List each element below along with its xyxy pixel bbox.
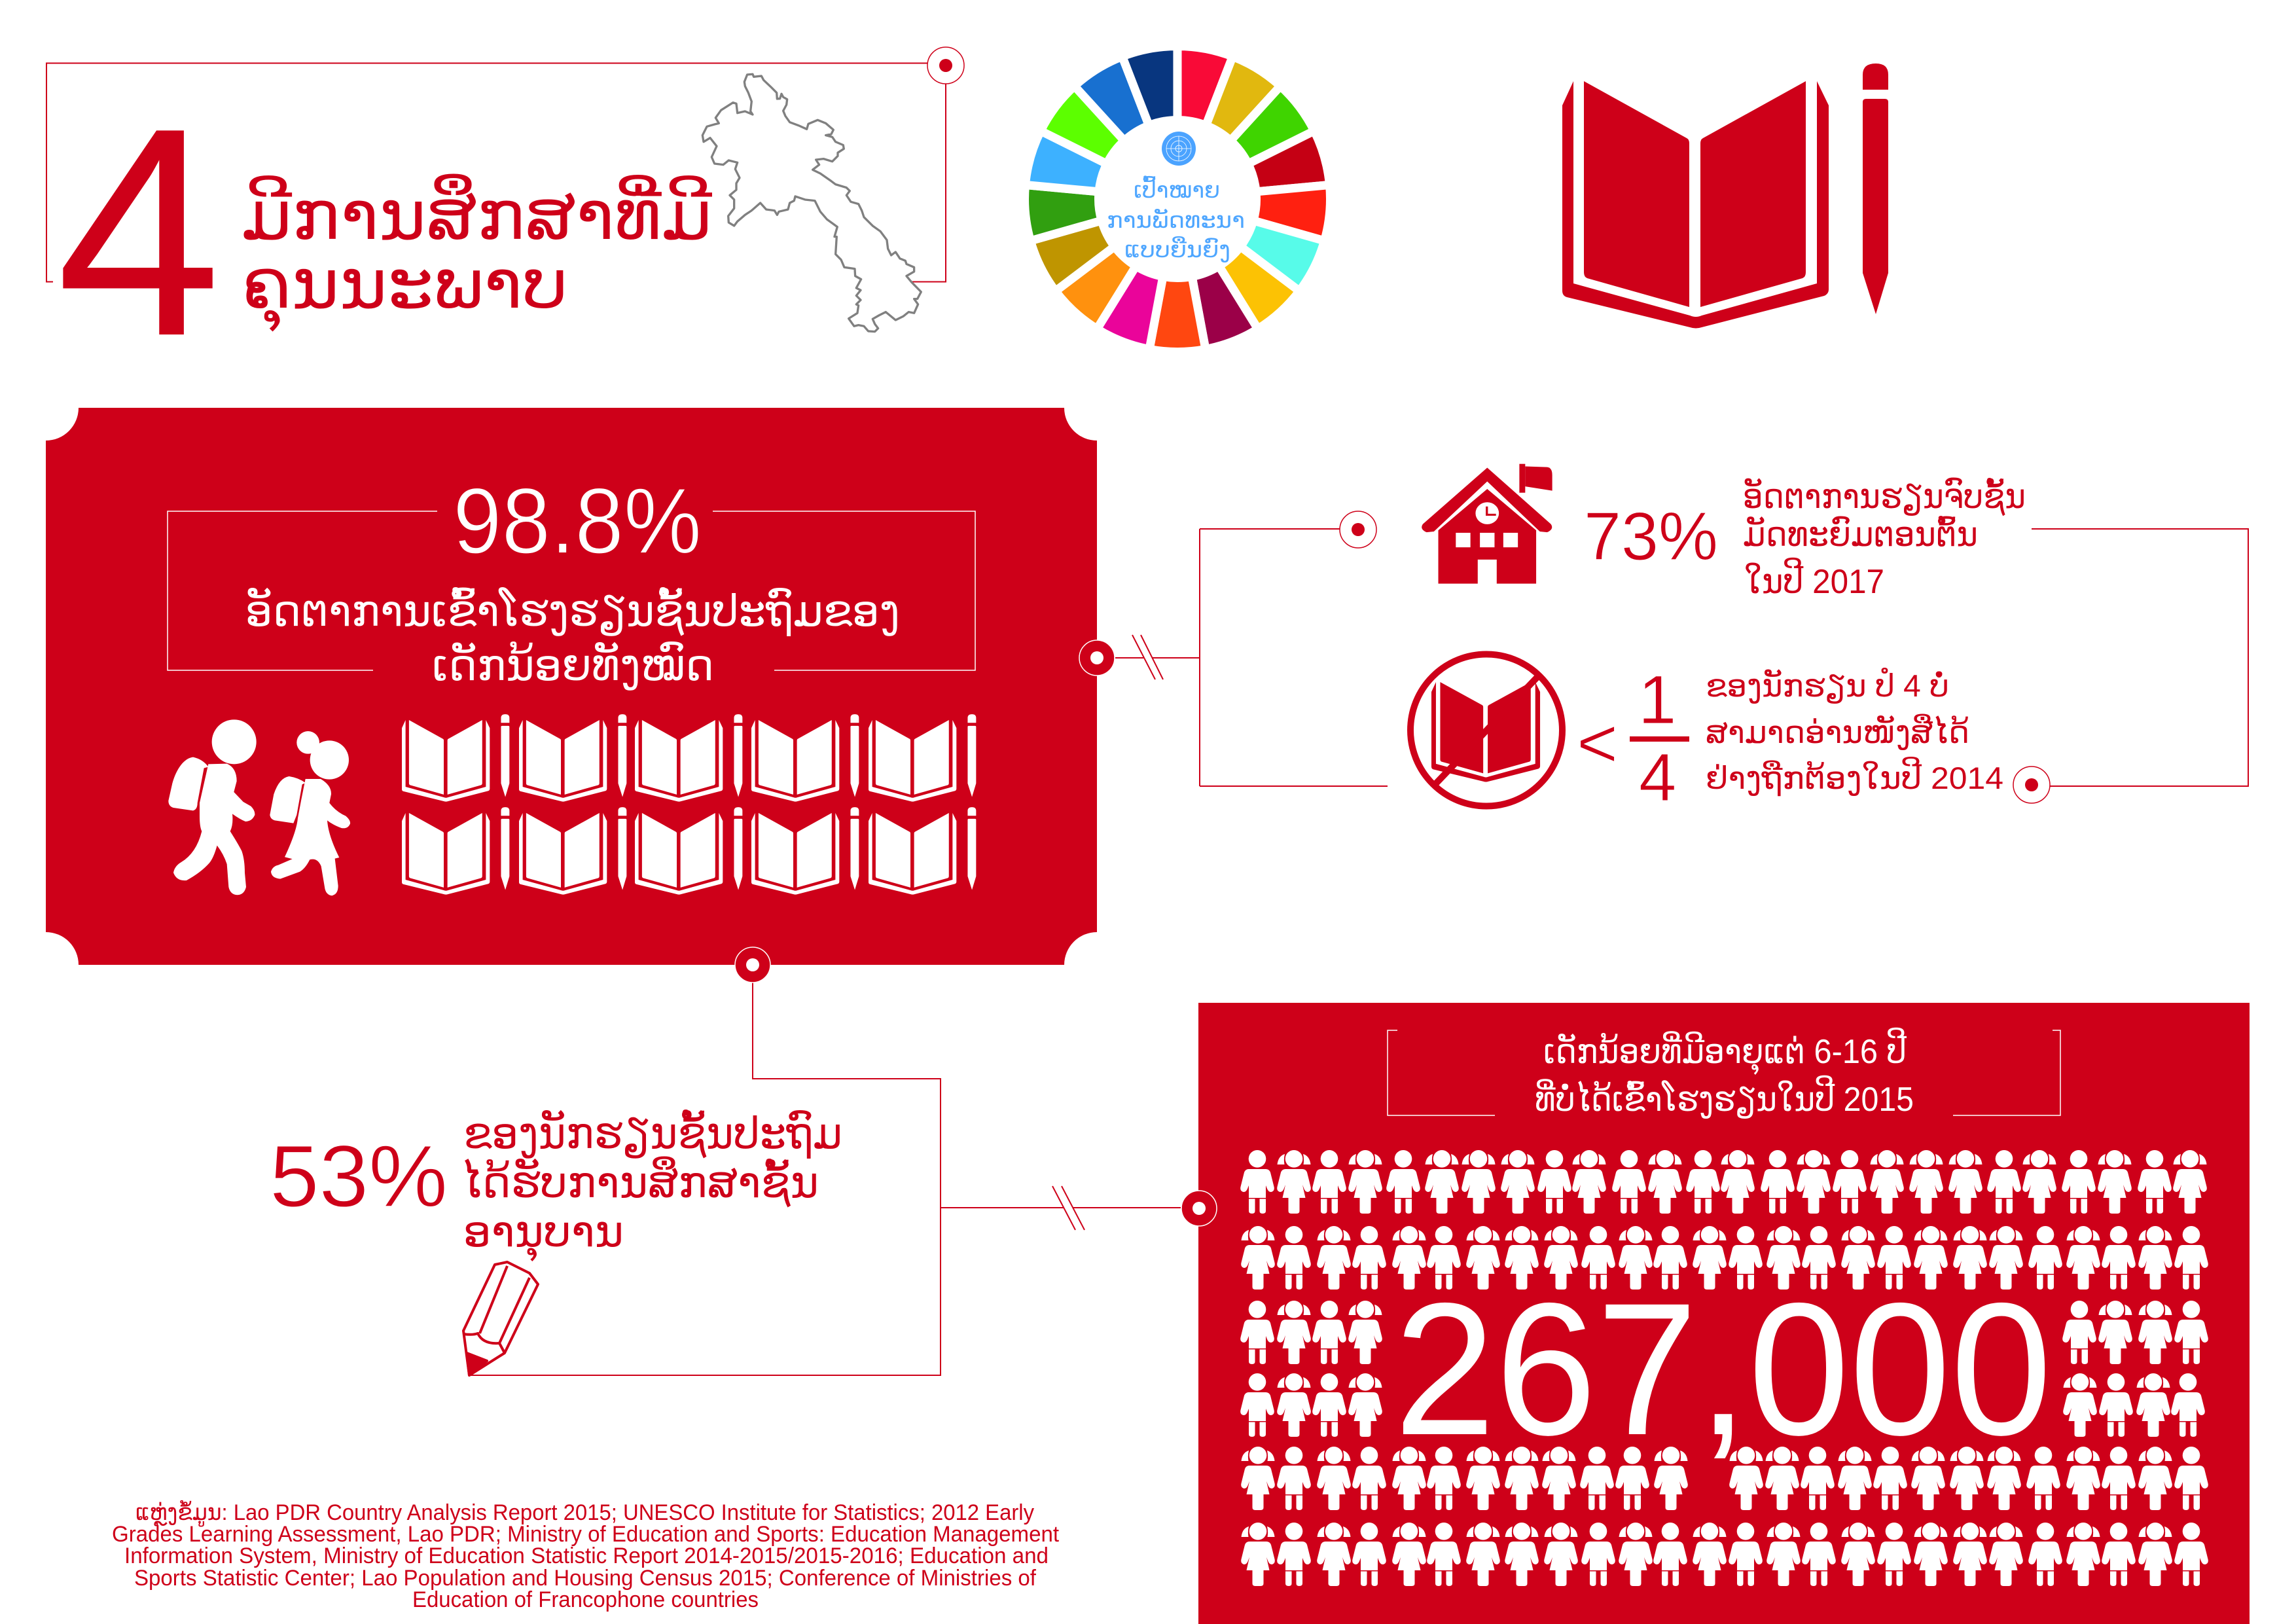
text: grade 4 reading: ສາມາດອ່ານໜັງສືໄດ້ (1706, 714, 1969, 750)
text: lower secondary completion: ອັດຕາການຮຽນຈົບຊັ້ນ (1743, 477, 2026, 516)
text: pre-primary education: ໄດ້ຮັບການສຶກສາຊັ້ນ (461, 1155, 819, 1208)
panel: out-of-school children (1181, 1003, 2250, 1624)
sources footnote: Grades Learning Assessment, Lao PDR; Ministry of Education and Sports: Education Management (112, 1522, 1060, 1547)
icon: school with flag (1422, 464, 1552, 584)
connector: panel to secondary stats (1079, 511, 2248, 803)
sources footnote: Education of Francophone countries (412, 1587, 759, 1612)
panel heading (1535, 1028, 1914, 1119)
panel heading: ເດັກນ້ອຍທີ່ມີອາຍຸແຕ່ 6-16 ປີ (1543, 1028, 1907, 1075)
sources footnote (112, 1500, 1060, 1612)
SDG wheel (1015, 37, 1339, 359)
map of Laos (702, 74, 921, 332)
stat: 53%: 53% (270, 1128, 448, 1225)
text: lower secondary completion: ໃນປີ 2017 (1744, 558, 1884, 601)
text: pre-primary education: ຂອງນັກຮຽນຊັ້ນປະຖົມ (463, 1109, 842, 1159)
icon grid: books and pencils (402, 714, 976, 895)
stat: less than one quarter (1577, 662, 1689, 815)
marker: panel connector (1181, 1191, 1217, 1226)
text: grade 4 reading (1706, 668, 2003, 796)
stat: less than one quarter: < (1577, 703, 1618, 782)
stat: 98.8%: 98.8% (453, 469, 702, 573)
connector: panel to pre-primary and out-of-school stats (469, 947, 1181, 1375)
panel caption (245, 586, 900, 690)
goal number 4: 4 (56, 66, 221, 397)
text: grade 4 reading: ຢ່າງຖືກຕ້ອງໃນປີ 2014 (1706, 757, 2003, 796)
text: pre-primary education: ອານຸບານ (463, 1207, 624, 1262)
title: quality education: ມີການສຶກສາທີ່ມີ (242, 173, 712, 254)
text: pre-primary education (461, 1109, 842, 1262)
title: quality education (242, 173, 712, 331)
text: lower secondary completion (1743, 477, 2026, 601)
title: quality education: ຄຸນນະພາບ (242, 247, 568, 331)
stat: 73%: 73% (1584, 499, 1718, 575)
wheel label: ເປົ້າໝາຍ (1134, 175, 1220, 203)
text: lower secondary completion: ມັດທະຍົມຕອນຕົ້ນ (1743, 515, 1978, 554)
panel: pre-primary enrolment (46, 408, 1097, 965)
icon: crossed-out book (1410, 655, 1562, 806)
wheel segments (1015, 37, 1339, 359)
stat: less than one quarter: 1 (1638, 662, 1676, 738)
sources footnote: Sports Statistic Center; Lao Population and Housing Census 2015; Conference of Ministries of (134, 1566, 1037, 1591)
wheel label: ແບບຍືນຍົງ (1124, 236, 1230, 262)
sources footnote: Information System, Ministry of Education Statistic Report 2014-2015/2015-2016; Education and (124, 1543, 1049, 1568)
header frame with marker (46, 47, 964, 281)
wheel label (1107, 175, 1245, 262)
pictogram grid: children (1240, 1150, 2208, 1586)
stat: 267,000: 267,000 (1394, 1264, 2052, 1475)
text: grade 4 reading: ຂອງນັກຮຽນ ປໍ 4 ບໍ່ (1706, 668, 1949, 704)
icon: children walking with backpacks (168, 719, 350, 895)
wheel label: ການພັດທະນາ (1107, 208, 1245, 233)
panel caption: ອັດຕາການເຂົ້າໂຮງຮຽນຊັ້ນປະຖົມຂອງ (245, 586, 900, 636)
icon: pencil (463, 1262, 538, 1375)
stat: less than one quarter: 4 (1639, 740, 1676, 815)
sources footnote: ແຫຼ່ງຂໍ້ມູນ: Lao PDR Country Analysis Report 2015; UNESCO Institute for Statistics; 2012 Early (135, 1500, 1034, 1526)
icon: UN emblem (1162, 132, 1196, 166)
icon: large book and pencil (1562, 63, 1888, 329)
panel caption: ເດັກນ້ອຍທັງໝົດ (432, 641, 714, 690)
panel heading: ທີ່ບໍ່ໄດ້ເຂົ້າໂຮງຮຽນໃນປີ 2015 (1535, 1075, 1914, 1119)
